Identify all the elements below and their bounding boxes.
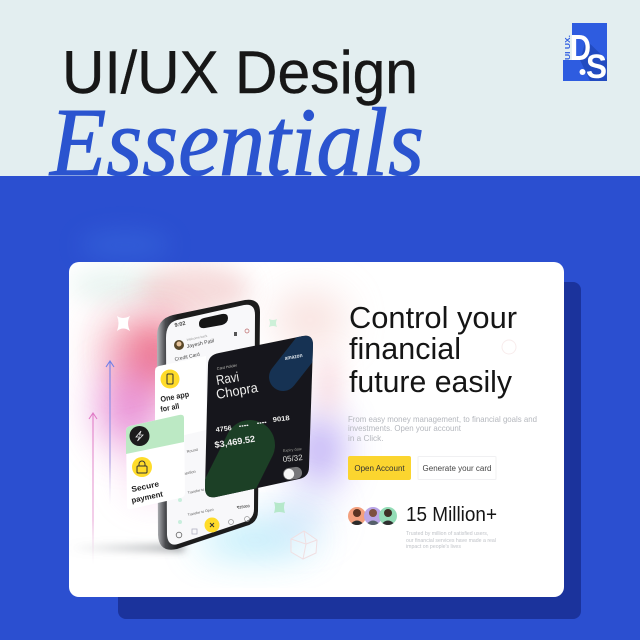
- description: in a Click.: [348, 434, 384, 443]
- icon: phone: [160, 370, 180, 388]
- avatars: [348, 507, 397, 526]
- stat caption: Trusted by million of satisfied users,: [406, 531, 488, 537]
- button: open account: [348, 456, 411, 480]
- decorative ring: [502, 340, 516, 354]
- phone list rows: card: [183, 427, 191, 432]
- stat caption: [406, 531, 496, 550]
- phone: Transfer to Open: [187, 486, 214, 495]
- title: UI/UX Design: [62, 39, 418, 106]
- phone: 9:02: [174, 321, 186, 329]
- logo: UI UX DS: S: [586, 48, 607, 86]
- toggle: [282, 466, 303, 481]
- credit card: Ravi: [215, 369, 240, 388]
- icon: bolt: [130, 426, 150, 446]
- stat caption: impact on people's lives: [406, 544, 461, 550]
- floating card: secure payment: Secure: [131, 479, 160, 494]
- stat caption: our financial services have made a real: [406, 538, 496, 544]
- card shapes: [215, 330, 320, 515]
- blue glow behind card: [80, 231, 170, 259]
- floating card: one app for all: for all: [160, 402, 180, 414]
- credit card: Chopra: [215, 380, 259, 402]
- sparkles: [117, 316, 285, 513]
- credit card: Expiry date: [283, 447, 302, 453]
- credit card: 9018: [272, 415, 290, 424]
- floating card: secure payment: payment: [131, 489, 164, 505]
- credit card: [205, 336, 313, 498]
- credit card: $3,469.52: [214, 434, 256, 450]
- floating card: one app for all: One app: [160, 390, 190, 404]
- button: generate your card: Generate your card: [423, 464, 491, 473]
- icon: lock: [132, 457, 152, 477]
- button: generate your card: [418, 456, 496, 480]
- headline: future easily: [349, 364, 512, 399]
- phone: Credit Card: [174, 352, 201, 363]
- floor shadow: [69, 545, 184, 551]
- headline: [349, 300, 517, 399]
- phone: [157, 300, 260, 550]
- phone notch: [199, 314, 228, 328]
- profile: [174, 340, 184, 350]
- credit card: 05/32: [282, 453, 304, 464]
- title: [48, 39, 424, 196]
- phone: section: [183, 470, 196, 476]
- description: From easy money management, to financial goals and: [348, 415, 537, 424]
- headline: financial: [349, 331, 461, 366]
- title: Essentials: [48, 89, 424, 196]
- header band: [0, 0, 640, 176]
- credit card: amazon: [284, 353, 304, 362]
- gradient glow background: [69, 264, 345, 552]
- credit card: ••••: [239, 423, 250, 430]
- button: open account: Open Account: [354, 464, 405, 473]
- phone: Round: [186, 448, 198, 454]
- credit card: Card Holder: [216, 363, 238, 371]
- arrows: [89, 361, 114, 565]
- phone: Jayesh Patil: [186, 338, 215, 350]
- main white card: [69, 262, 564, 597]
- phone: Transfer to Open: [187, 508, 214, 517]
- phone bottom nav: [204, 518, 220, 532]
- dark offset panel: [118, 282, 581, 619]
- phone: ₹25000: [236, 503, 250, 510]
- description: [348, 415, 537, 443]
- stat: 15 million: 15 Million+: [406, 504, 497, 526]
- logo: UI UX DS: UI UX.: [565, 35, 572, 60]
- phone: Welcome back: [186, 334, 208, 342]
- description: investments. Open your account: [348, 424, 462, 433]
- credit card: ••••: [257, 420, 268, 427]
- background: blue lower section: [0, 176, 640, 640]
- floating card: secure payment: [126, 415, 185, 509]
- headline: Control your: [349, 300, 517, 335]
- decorative polyhedron: [291, 531, 317, 559]
- logo: UI UX DS: D: [570, 27, 591, 68]
- floating card: one app for all: [155, 356, 206, 441]
- credit card: 4756: [215, 425, 232, 434]
- logo: UI UX DS: [563, 23, 607, 86]
